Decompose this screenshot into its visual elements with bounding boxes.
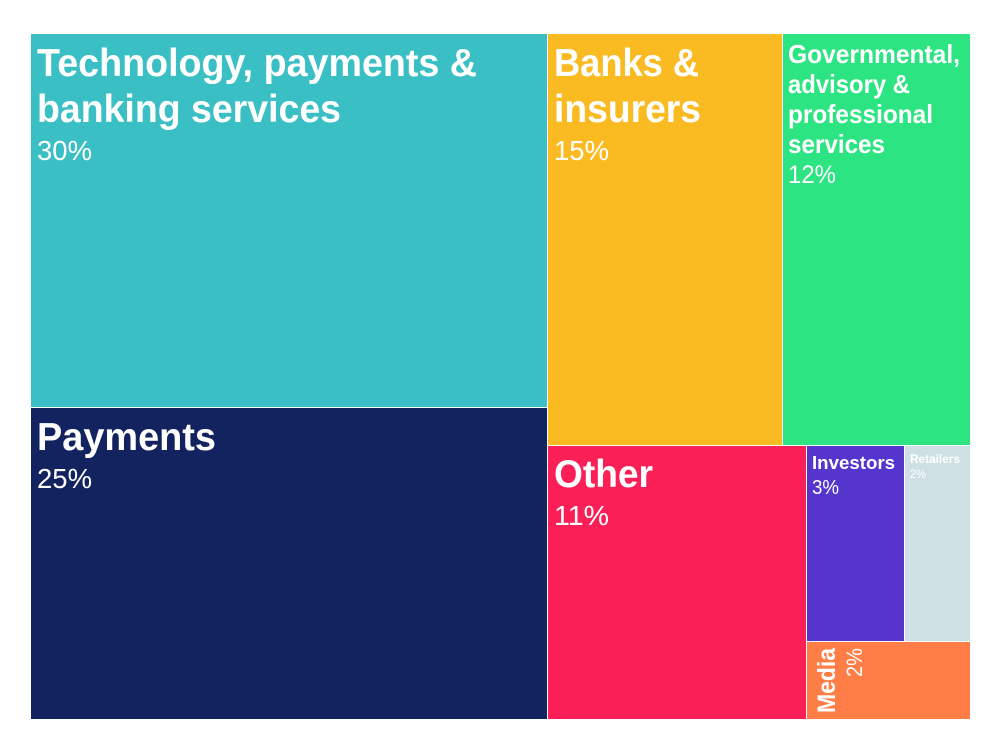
- panel: investors: [807, 446, 904, 641]
- panel: banks & insurers: 15%: [554, 135, 609, 166]
- panel: governmental, advisory & professional services: professional: [788, 99, 933, 129]
- panel: banks & insurers: Banks &: [554, 42, 699, 85]
- panel: banks & insurers: insurers: [554, 88, 701, 131]
- panel: investors: Investors: [812, 453, 895, 473]
- panel: retailers: 2%: [910, 467, 926, 481]
- panel: payments: 25%: [37, 463, 92, 494]
- panel: payments: Payments: [37, 416, 216, 459]
- panel: other: Other: [554, 453, 653, 496]
- panel: other: [548, 446, 806, 719]
- panel: technology, payments & banking services: 30%: [37, 135, 92, 166]
- panel: investors: 3%: [812, 477, 839, 499]
- panel: banks & insurers: [548, 34, 782, 445]
- panel: governmental, advisory & professional services: services: [788, 129, 885, 159]
- panel: governmental, advisory & professional services: [783, 34, 970, 445]
- panel: technology, payments & banking services: banking services: [37, 88, 341, 131]
- panel: payments: [31, 408, 547, 719]
- panel: governmental, advisory & professional services: 12%: [788, 161, 836, 189]
- panel: technology, payments & banking services: Technology, payments &: [37, 42, 477, 85]
- panel: media: Media: [813, 647, 841, 713]
- panel: retailers: Retailers: [910, 452, 960, 466]
- panel: media: [807, 642, 970, 719]
- panel: media: 2%: [842, 648, 867, 677]
- panel: retailers: [905, 446, 970, 641]
- panel: governmental, advisory & professional services: Governmental,: [788, 39, 960, 69]
- panel: technology, payments & banking services: [31, 34, 547, 407]
- panel: governmental, advisory & professional services: advisory &: [788, 69, 910, 99]
- panel: other: 11%: [554, 500, 609, 531]
